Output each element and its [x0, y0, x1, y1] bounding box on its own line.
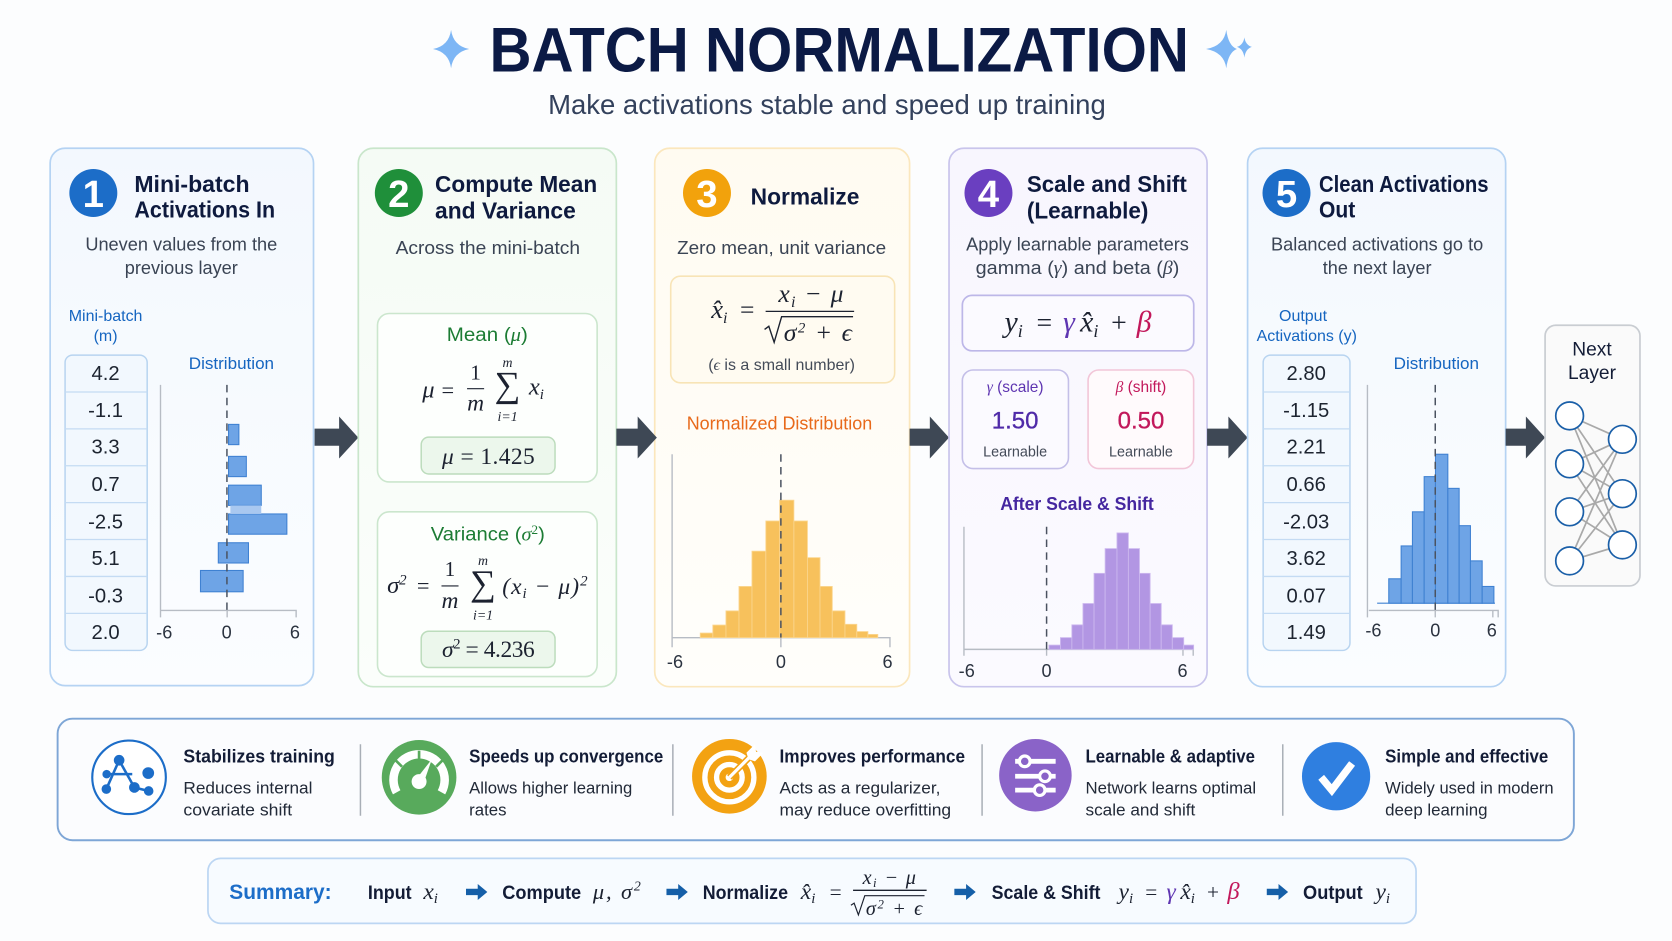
variance formula: i	[523, 586, 527, 602]
input distribution chart: 0	[222, 623, 232, 643]
neural network icon	[1556, 402, 1636, 575]
scale and shift formula: x̂	[1080, 306, 1093, 339]
input value table: 5.1	[92, 548, 120, 570]
mean formula: m	[503, 355, 513, 370]
variance formula: −	[528, 574, 557, 600]
mean formula: i=1	[498, 409, 518, 424]
normalize formula box: x	[778, 279, 790, 308]
distribution label: Distribution	[189, 354, 274, 373]
variance formula: ∑	[470, 563, 496, 603]
step 5 badge: 5	[1276, 173, 1297, 216]
normalize formula box: 2	[798, 321, 806, 337]
scale and shift formula: y	[1004, 306, 1018, 339]
output activations label	[1257, 308, 1357, 345]
benefit text	[779, 745, 965, 820]
input value table: 3.3	[92, 437, 120, 459]
benefit text: deep learning	[1385, 801, 1488, 820]
input value table: 4.2	[92, 363, 120, 385]
summary: output: y	[1376, 879, 1386, 905]
icon: graph nodes	[92, 741, 166, 814]
variance formula: m	[478, 553, 488, 568]
mean result: μ = 1.425	[441, 444, 535, 470]
variance heading: Variance ( σ	[431, 525, 531, 546]
summary: normalize: ϵ	[914, 898, 922, 920]
title: BATCH NORMALIZATION	[489, 15, 1189, 85]
benefit: speeds up convergence	[382, 740, 663, 820]
mean formula: μ	[421, 377, 435, 404]
step 3 badge: 3	[696, 173, 718, 216]
mean formula	[421, 355, 544, 424]
variance result: 2	[453, 636, 461, 652]
after scale and shift chart: 0	[1042, 661, 1052, 681]
variance formula: μ)	[558, 574, 579, 600]
step 5 description: the next layer	[1323, 257, 1432, 278]
after scale and shift chart	[959, 527, 1194, 681]
normalize formula box: σ	[784, 318, 796, 347]
step 1 heading: Mini-batch	[134, 171, 250, 197]
beta card: β (shift)	[1115, 379, 1166, 396]
step 1 badge	[69, 169, 117, 217]
output value table: 0.07	[1287, 585, 1326, 607]
summary: normalize: μ	[906, 867, 916, 889]
arrow: step 1 to 2	[315, 416, 358, 459]
mean heading: Mean (μ)	[447, 325, 528, 346]
input value table: 0.7	[92, 474, 120, 496]
input value table: -1.1	[88, 400, 123, 422]
summary: scale and shift: Scale & Shift	[992, 883, 1101, 904]
input value table: 2.0	[92, 622, 120, 644]
input distribution chart	[156, 385, 300, 643]
input value table: -2.5	[88, 511, 123, 533]
step 4 heading	[1027, 171, 1187, 224]
normalized distribution chart: 6	[883, 652, 893, 672]
summary: compute	[502, 878, 641, 904]
panel: next layer	[1545, 325, 1640, 586]
benefit text	[469, 745, 663, 820]
step 4 description: gamma ( γ) and beta ( β)	[976, 257, 1179, 279]
summary: input: x	[423, 879, 434, 905]
mean formula: ∑	[495, 365, 521, 405]
summary: normalize: 2	[877, 897, 884, 911]
benefit text	[183, 745, 335, 820]
icon: speedometer	[382, 740, 456, 815]
variance heading: )	[538, 525, 545, 546]
variance formula: 1	[445, 557, 455, 581]
step 2 description: Across the mini-batch	[396, 237, 580, 258]
panel: benefits band	[58, 719, 1574, 840]
summary: normalize	[703, 867, 927, 920]
normalize formula box: −	[797, 279, 829, 308]
normalized distribution chart	[667, 454, 893, 672]
mean card	[377, 313, 597, 482]
gamma card: γ (scale)	[987, 379, 1044, 396]
normalize formula box: ϵ	[842, 318, 852, 347]
variance formula: m	[442, 588, 458, 614]
summary: input: Input	[368, 883, 412, 904]
summary: normalize: +	[886, 898, 913, 920]
next layer label	[1568, 340, 1617, 384]
summary: scale and shift: i	[1129, 891, 1133, 907]
summary arrow	[466, 884, 487, 900]
input distribution chart: 6	[290, 623, 300, 643]
output distribution chart: 0	[1430, 621, 1440, 641]
mean formula: m	[467, 391, 484, 417]
panel: step 3 normalize	[655, 148, 910, 687]
step 3 badge	[683, 169, 731, 217]
variance formula: σ	[387, 572, 399, 599]
summary: compute: Compute	[502, 883, 581, 904]
summary: normalize: i	[811, 891, 815, 907]
step 4 description	[966, 234, 1189, 279]
summary: output: i	[1386, 891, 1390, 907]
benefit text: Speeds up convergence	[469, 745, 663, 766]
scale and shift formula: +	[1111, 307, 1127, 338]
benefit text: scale and shift	[1086, 801, 1196, 820]
summary: normalize: x	[863, 867, 872, 889]
step 4 heading: Scale and Shift	[1027, 171, 1187, 197]
summary: input	[368, 879, 438, 907]
normalized distribution chart: -6	[667, 652, 683, 672]
icon: right sparkles	[1206, 30, 1252, 68]
summary: compute: μ, σ	[593, 879, 632, 904]
icon: target	[692, 739, 767, 814]
normalize formula box: +	[807, 318, 840, 347]
step 2 heading: and Variance	[435, 198, 576, 224]
mean formula: 1	[470, 361, 481, 385]
panel: step 4 scale and shift	[949, 148, 1207, 687]
output value table: 3.62	[1287, 548, 1326, 570]
summary: output	[1303, 879, 1390, 907]
summary arrow	[954, 884, 976, 900]
summary: output: Output	[1303, 883, 1363, 904]
step 4 description: Apply learnable parameters	[966, 234, 1189, 255]
summary: scale and shift: x̂	[1180, 879, 1191, 905]
arrow: step 2 to 3	[616, 416, 657, 459]
output activations label: Activations (y)	[1257, 328, 1357, 345]
scale and shift formula	[962, 295, 1194, 351]
benefit text: Improves performance	[779, 745, 965, 766]
summary: input: i	[434, 891, 438, 907]
variance formula: (x	[502, 574, 522, 600]
mini-batch label	[69, 308, 142, 345]
beta card: Learnable	[1109, 444, 1173, 460]
summary: normalize: σ	[866, 898, 876, 920]
next layer label: Next	[1572, 340, 1612, 361]
summary: scale and shift: y	[1119, 879, 1129, 905]
mean formula: =	[441, 378, 454, 403]
normalize formula box: μ	[831, 279, 843, 308]
step 2 heading	[435, 171, 597, 224]
beta card: 0.50	[1118, 408, 1164, 435]
output value table: -1.15	[1283, 400, 1329, 422]
scale and shift formula: γ	[1063, 306, 1076, 339]
step 2 badge	[375, 169, 423, 217]
summary: scale and shift: =	[1145, 880, 1157, 904]
variance formula	[387, 553, 588, 623]
after scale and shift chart: -6	[959, 661, 975, 681]
variance result	[421, 631, 555, 667]
output value table: 0.66	[1287, 474, 1326, 496]
step 1 heading	[134, 171, 275, 223]
step 1 badge: 1	[83, 173, 104, 216]
variance formula: 2	[580, 573, 588, 589]
mean formula: x	[529, 374, 540, 401]
output value table: -2.03	[1283, 511, 1329, 533]
summary: normalize: −	[878, 867, 904, 889]
normalize formula box: =	[740, 295, 754, 324]
normalize formula box: i	[791, 294, 795, 311]
output distribution chart	[1365, 385, 1498, 641]
gamma card: 1.50	[992, 408, 1038, 435]
step 2 heading: Compute Mean	[435, 171, 597, 197]
summary label: Summary:	[229, 880, 332, 904]
output distribution chart: 6	[1487, 621, 1497, 641]
scale and shift formula: β	[1136, 306, 1152, 339]
normalize formula box	[671, 276, 895, 383]
benefit text: covariate shift	[183, 801, 292, 820]
normalize formula box: x̂	[711, 294, 723, 324]
epsilon note: (ϵ is a small number)	[708, 357, 855, 374]
subtitle: Make activations stable and speed up training	[548, 89, 1106, 120]
summary: scale and shift: β	[1226, 878, 1240, 905]
variance formula: 2	[399, 572, 407, 588]
scale and shift formula: =	[1036, 307, 1052, 338]
step 5 badge	[1263, 169, 1310, 217]
gamma card	[962, 370, 1068, 469]
step 2 badge: 2	[388, 173, 409, 216]
icon: sliders	[999, 739, 1072, 811]
step 5 description: Balanced activations go to	[1271, 234, 1483, 255]
summary: scale and shift	[992, 878, 1240, 907]
arrow: step 3 to 4	[910, 416, 949, 459]
variance result: = 4.236	[460, 637, 535, 663]
benefit text: Reduces internal	[183, 778, 312, 797]
output value table: 2.80	[1287, 363, 1326, 385]
icon: left sparkle	[433, 30, 469, 68]
benefit text: Widely used in modern	[1385, 778, 1554, 797]
scale and shift formula: i	[1018, 321, 1023, 341]
step 1 description: previous layer	[125, 257, 238, 278]
summary: scale and shift: i	[1191, 891, 1195, 907]
mini-batch label: (m)	[94, 328, 118, 345]
step 3 heading: Normalize	[751, 184, 859, 210]
output activations label: Output	[1279, 308, 1328, 325]
mini-batch label: Mini-batch	[69, 308, 142, 325]
input distribution chart: -6	[156, 623, 172, 643]
benefit text	[1385, 745, 1554, 820]
panel: summary bar	[208, 858, 1416, 923]
benefit: learnable and adaptive	[999, 739, 1256, 820]
summary: normalize: x̂	[801, 879, 811, 905]
summary: normalize: =	[830, 880, 842, 904]
summary: normalize: Normalize	[703, 883, 788, 904]
benefit text: rates	[469, 801, 507, 820]
variance formula: =	[417, 573, 430, 598]
step 3 description: Zero mean, unit variance	[677, 237, 886, 258]
normalize formula box: i	[723, 310, 728, 327]
output value table: 2.21	[1287, 437, 1326, 459]
scale and shift formula: i	[1093, 321, 1098, 341]
benefit text: Learnable & adaptive	[1086, 745, 1255, 766]
step 1 heading: Activations In	[134, 197, 275, 223]
step 5 description	[1271, 234, 1483, 278]
panel: step 5 clean activations out	[1248, 148, 1506, 687]
mean formula: i	[540, 387, 544, 403]
output value table	[1263, 355, 1350, 650]
step 5 heading: Out	[1319, 197, 1355, 223]
output value table: 1.49	[1287, 622, 1326, 644]
summary arrow	[666, 884, 688, 900]
benefit text: Network learns optimal	[1086, 778, 1256, 797]
benefit text: Simple and effective	[1385, 745, 1548, 766]
gamma card: Learnable	[983, 444, 1047, 460]
arrow: step 4 to 5	[1207, 416, 1248, 459]
step 4 badge	[964, 169, 1012, 217]
variance result: σ	[442, 637, 455, 663]
benefit text: Allows higher learning	[469, 778, 632, 797]
summary: compute: 2	[634, 878, 641, 893]
normalized distribution title: Normalized Distribution	[687, 414, 872, 434]
benefit text: Stabilizes training	[183, 745, 335, 766]
summary: normalize: i	[873, 876, 877, 890]
beta card	[1088, 370, 1194, 469]
variance heading: 2	[531, 523, 538, 537]
benefit text: Acts as a regularizer,	[779, 778, 940, 797]
after scale and shift chart: 6	[1178, 661, 1188, 681]
benefit: improves performance	[692, 739, 965, 820]
benefit: stabilizes training	[92, 741, 335, 820]
icon: check mark	[1302, 742, 1370, 810]
next layer label: Layer	[1568, 363, 1617, 384]
step 5 heading	[1319, 171, 1489, 223]
step 1 description	[85, 234, 277, 278]
distribution label: Distribution	[1394, 354, 1479, 373]
benefit text	[1086, 745, 1256, 820]
after scale and shift title: After Scale & Shift	[1000, 494, 1154, 514]
input value table: -0.3	[88, 585, 123, 607]
panel: step 2 compute mean and variance	[358, 148, 616, 687]
variance card	[377, 512, 597, 677]
variance formula: i=1	[473, 608, 493, 623]
step 1 description: Uneven values from the	[85, 234, 277, 255]
benefit text: may reduce overfitting	[779, 801, 951, 820]
output distribution chart: -6	[1365, 621, 1381, 641]
summary: scale and shift: +	[1207, 880, 1219, 904]
step 5 heading: Clean Activations	[1319, 171, 1489, 197]
panel: step 1 mini-batch activations in	[50, 148, 314, 686]
step 4 badge: 4	[978, 173, 1000, 216]
summary: scale and shift: γ	[1167, 879, 1177, 905]
arrow: step 5 to next layer	[1506, 416, 1545, 459]
normalized distribution chart: 0	[776, 652, 786, 672]
input value table	[65, 355, 147, 650]
summary arrow	[1267, 884, 1288, 900]
step 4 heading: (Learnable)	[1027, 198, 1148, 224]
benefit: simple and effective	[1302, 742, 1554, 820]
mean result	[421, 437, 555, 474]
